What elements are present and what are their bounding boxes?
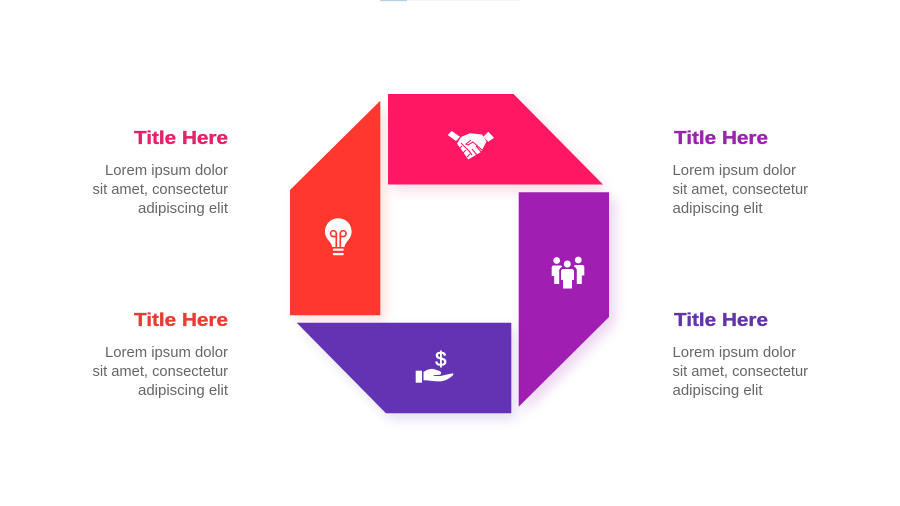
heading: top right: Title Here xyxy=(674,127,768,148)
text block: bottom left: adipiscing elit xyxy=(138,383,228,399)
text block: bottom left: Lorem ipsum dolor xyxy=(105,345,228,361)
icon: handshake xyxy=(448,131,494,160)
text block: bottom right: Lorem ipsum dolor xyxy=(672,345,796,361)
text block: top right: Lorem ipsum dolor xyxy=(672,163,796,179)
heading: bottom left: Title Here xyxy=(134,309,228,330)
text block: bottom right: adipiscing elit xyxy=(672,383,762,399)
text block: top left xyxy=(92,127,228,217)
text block: top right xyxy=(672,127,808,217)
text block: bottom right xyxy=(672,309,808,399)
text block: top right: sit amet, consectetur xyxy=(672,182,808,198)
icon: group of people xyxy=(552,257,584,288)
icon: hand holding dollar: $ xyxy=(435,349,446,371)
text block: top left: sit amet, consectetur xyxy=(92,182,228,198)
panel: pink segment xyxy=(388,94,608,190)
panel: indigo segment xyxy=(297,323,516,419)
heading: bottom right: Title Here xyxy=(674,309,768,330)
panel: red segment xyxy=(290,101,385,320)
text block: top right: adipiscing elit xyxy=(672,201,762,217)
top edge sliver xyxy=(380,0,520,1)
icon: light bulb xyxy=(325,218,352,255)
text block: bottom left: sit amet, consectetur xyxy=(92,364,228,380)
text block: top left: Lorem ipsum dolor xyxy=(105,163,228,179)
panel: magenta purple segment xyxy=(519,192,615,413)
icon: hand holding dollar xyxy=(416,349,453,383)
heading: top left: Title Here xyxy=(134,127,228,148)
text block: bottom left xyxy=(92,309,228,399)
text block: bottom right: sit amet, consectetur xyxy=(672,364,808,380)
text block: top left: adipiscing elit xyxy=(138,201,228,217)
